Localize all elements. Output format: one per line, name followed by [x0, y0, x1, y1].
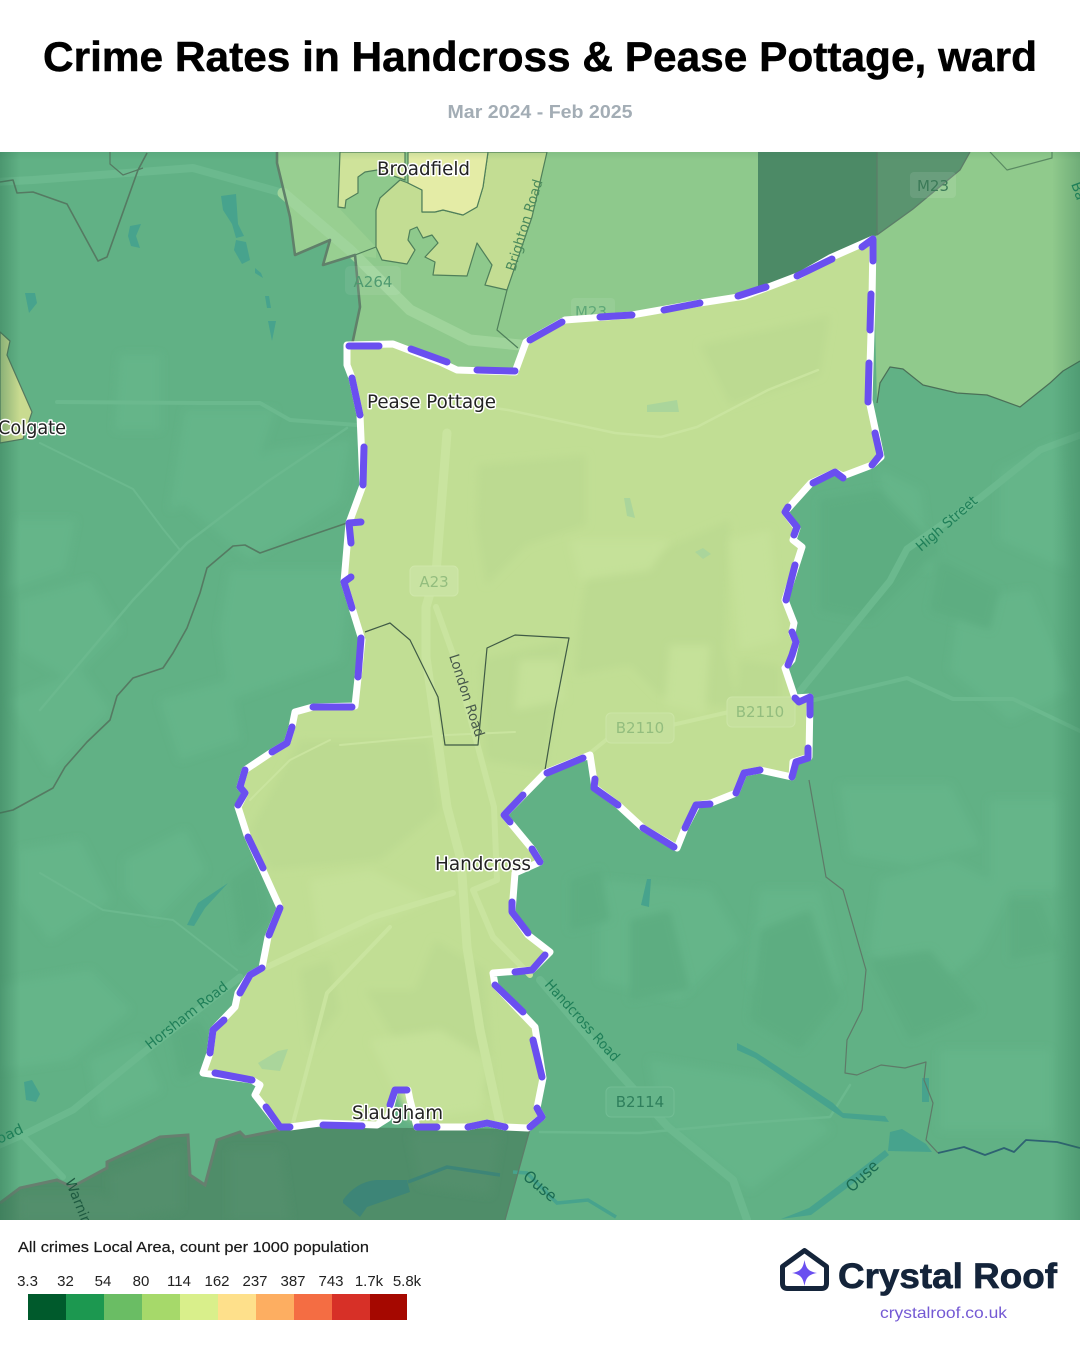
- south lake and stream: [343, 1167, 500, 1217]
- south region tones: [20, 1135, 500, 1220]
- ward fill: [203, 239, 881, 1128]
- legend tick labels: 1.7k: [355, 1273, 384, 1290]
- legend tick labels: 162: [204, 1273, 230, 1290]
- road and river names: Horsham Road: [143, 979, 231, 1053]
- legend colour scale: [28, 1294, 407, 1320]
- subtitle: date range: Mar 2024 - Feb 2025: [448, 102, 632, 122]
- place names: Slaugham: [352, 1102, 443, 1124]
- legend tick labels: 54: [95, 1273, 111, 1290]
- place names: Colgate: [0, 417, 66, 439]
- logo: [782, 1250, 1057, 1322]
- road and river names: Warnin: [61, 1177, 94, 1228]
- wordmark: Crystal Roof: [838, 1257, 1057, 1296]
- road and river names: High Street: [913, 493, 981, 555]
- title: Crime Rates in Handcross & Pease Pottage, ward: [43, 33, 1037, 80]
- place names: Broadfield: [377, 158, 470, 180]
- roads outside the ward: [0, 168, 1080, 1220]
- place names: Pease Pottage: [367, 391, 496, 413]
- ward boundary: purple dashes: [210, 239, 880, 1127]
- legend: [17, 1239, 422, 1320]
- road plates: M23: [575, 303, 607, 321]
- dark top region east part: [877, 152, 970, 235]
- north-east green region: [873, 152, 1080, 407]
- road plates: [345, 172, 956, 1117]
- dark top region: [758, 152, 877, 288]
- legend tick labels: 237: [242, 1273, 268, 1290]
- road and river names: Brighton Road: [504, 178, 547, 273]
- road plates: A264: [354, 273, 392, 291]
- place names: Handcross: [435, 853, 531, 875]
- choropleth map: [0, 152, 1080, 1228]
- road plates: B2110: [616, 719, 664, 737]
- legend tick labels: [17, 1273, 422, 1290]
- legend tick labels: 5.8k: [393, 1273, 422, 1290]
- road plates: B2114: [616, 1093, 664, 1111]
- Broadfield lighter neighbourhoods: [338, 152, 547, 348]
- road plates: M23: [917, 177, 949, 195]
- north green region: [338, 152, 758, 368]
- road and river names: [0, 178, 1080, 1228]
- legend title: All crimes Local Area, count per 1000 population: [18, 1239, 369, 1256]
- legend tick labels: 80: [133, 1273, 149, 1290]
- green field patches: [0, 355, 1070, 1190]
- website: crystalroof.co.uk: [880, 1305, 1008, 1322]
- thin boundaries: [0, 152, 1080, 1155]
- ward boundary: white: [203, 239, 881, 1128]
- road and river names: Ouse: [519, 1167, 561, 1205]
- ward field patches: [250, 315, 830, 1100]
- road and river names: Handcross Road: [541, 977, 623, 1065]
- ward ponds: [258, 400, 711, 1071]
- road and river names: Ouse: [842, 1156, 883, 1196]
- road and river names: London Road: [445, 652, 487, 739]
- south boundary: [0, 1130, 280, 1203]
- edge vignette: [0, 152, 1080, 1220]
- road plates: B2110: [736, 703, 784, 721]
- icon: house with star: [782, 1250, 826, 1288]
- water bodies: [24, 194, 932, 1219]
- dark south region: [0, 1127, 530, 1220]
- legend tick labels: 114: [167, 1273, 191, 1290]
- north-west tinted band: [277, 152, 376, 265]
- road plates: A23: [419, 573, 449, 591]
- Colgate yellow region: [0, 332, 32, 443]
- river at the bottom: [513, 1172, 616, 1217]
- place names: [0, 158, 531, 1124]
- legend tick labels: 743: [318, 1273, 344, 1290]
- legend tick labels: 32: [57, 1273, 74, 1290]
- roads in ward: [250, 370, 818, 1123]
- legend tick labels: 3.3: [17, 1273, 38, 1290]
- legend tick labels: 387: [280, 1273, 306, 1290]
- M23 road in north region: [283, 193, 520, 345]
